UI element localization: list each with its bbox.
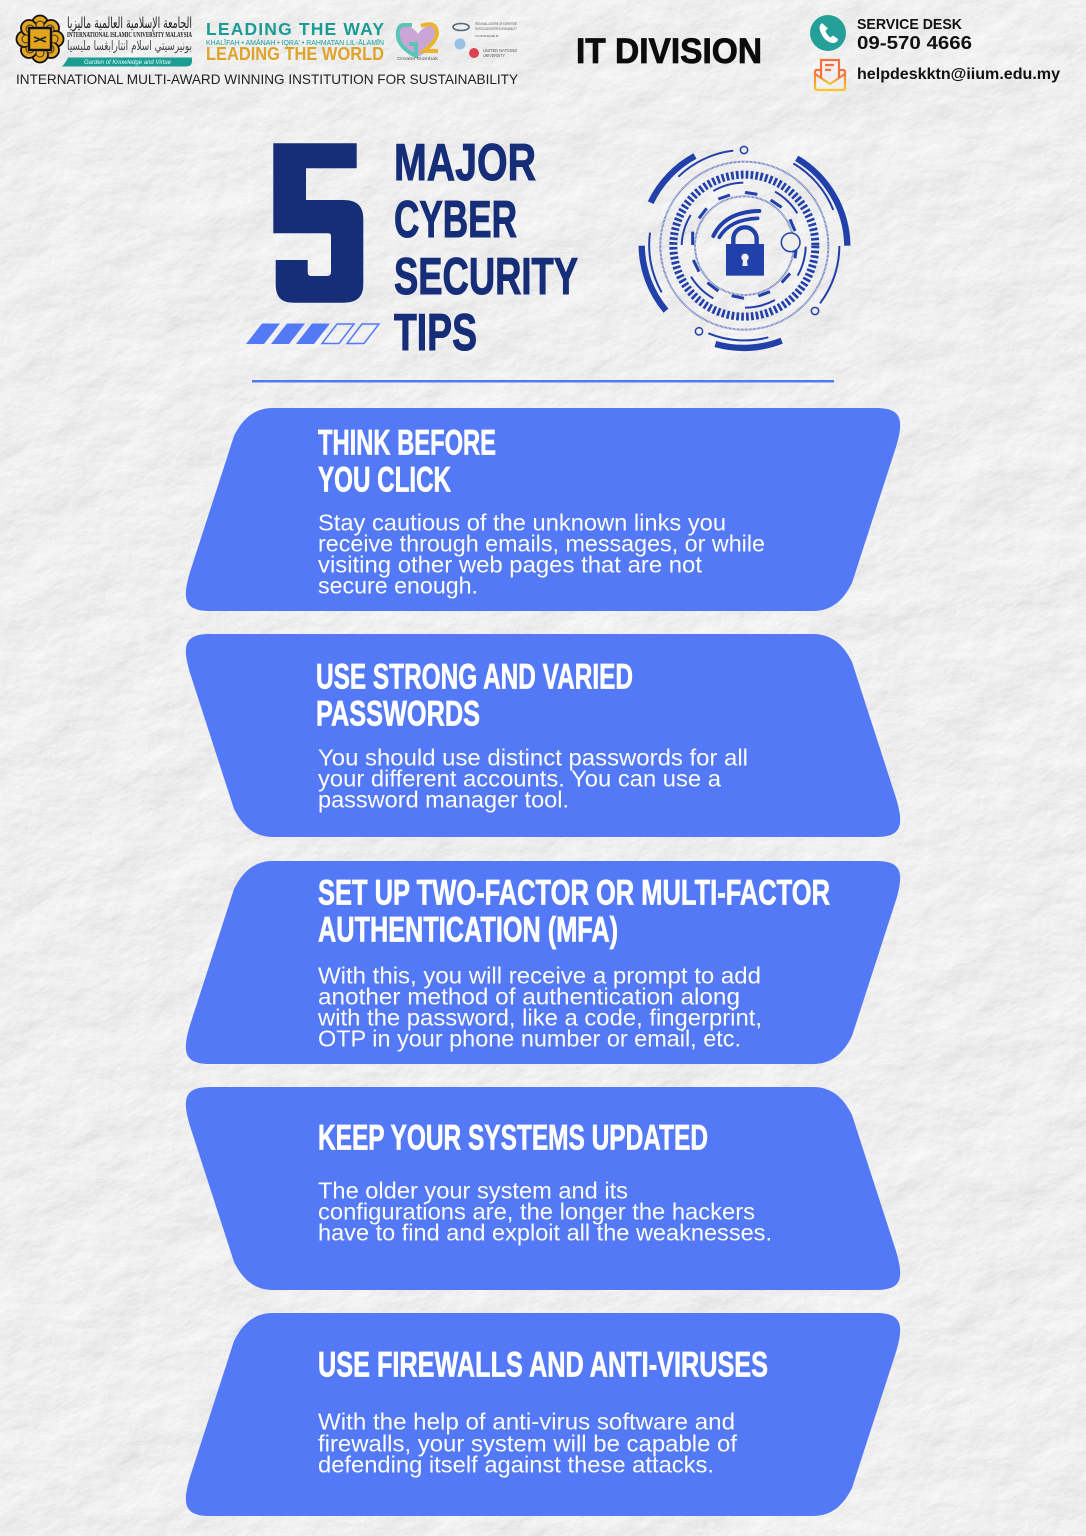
header tagline: INTERNATIONAL MULTI-AWARD WINNING INSTITUTION FOR SUSTAINABILITY — [16, 71, 519, 87]
title: MAJOR — [394, 134, 536, 192]
body text 2: You should use distinct passwords for all — [318, 744, 748, 770]
icon: email — [815, 60, 845, 90]
body text 3: another method of authentication along — [318, 984, 740, 1010]
heading 2 — [316, 658, 633, 734]
panel: firewalls and anti-viruses — [186, 1313, 900, 1516]
header: partner logos: UNIVERSITY — [483, 53, 505, 58]
big number 5 — [273, 143, 363, 303]
panel shape 3 — [186, 861, 900, 1064]
header: leading the way slogan: LEADING THE WORLD — [206, 43, 384, 64]
panel: strong passwords — [186, 634, 900, 837]
icon: greater gombak logo — [397, 24, 439, 61]
body text 3 — [317, 962, 762, 1052]
panel shape 5 — [186, 1313, 900, 1516]
body text 1 — [318, 510, 765, 598]
header: partner logos: UNITED NATIONS — [483, 48, 517, 53]
heading 3: AUTHENTICATION (MFA) — [318, 910, 618, 950]
heading 5: USE FIREWALLS AND ANTI-VIRUSES — [318, 1346, 768, 1384]
heading 4: KEEP YOUR SYSTEMS UPDATED — [318, 1118, 708, 1158]
body text 5: With the help of anti-virus software and — [318, 1408, 735, 1434]
heading 1: YOU CLICK — [318, 460, 451, 500]
panel shape 1 — [186, 408, 900, 611]
body text 2: password manager tool. — [318, 786, 569, 812]
body text 3: with the password, like a code, fingerprint, — [317, 1004, 762, 1030]
header: partner logos: ON EDUCATION FOR SUSTAINABILITY — [475, 27, 517, 31]
heading 3: SET UP TWO-FACTOR OR MULTI-FACTOR — [318, 874, 830, 912]
service desk contact — [857, 16, 972, 53]
divider line — [252, 380, 834, 382]
title: CYBER — [394, 191, 517, 249]
icon: phone — [810, 15, 846, 51]
body text 5: defending itself against these attacks. — [318, 1452, 714, 1478]
header: leading the way slogan: KHALĪFAH • AMĀNAH • IQRA' • RAHMATAN LIL-ĀLAMĪN — [206, 39, 384, 47]
heading 3 — [318, 874, 830, 950]
university name in English: INTERNATIONAL ISLAMIC UNIVERSITY MALAYSIA — [67, 30, 192, 39]
body text 4: configurations are, the longer the hackers — [318, 1198, 755, 1224]
icon: greater gombak logo: Greater Gombak — [397, 56, 439, 61]
body text 3: With this, you will receive a prompt to add — [318, 962, 761, 988]
header: leading the way slogan — [206, 19, 384, 64]
header: university logos — [16, 14, 192, 66]
body text 3: OTP in your phone number or email, etc. — [318, 1026, 741, 1052]
progress slashes — [246, 324, 379, 344]
body text 2: your different accounts. You can use a — [318, 766, 722, 792]
body text 4 — [318, 1178, 772, 1246]
body text 4: have to find and exploit all the weaknesses. — [318, 1220, 772, 1246]
panel: multi-factor authentication — [186, 861, 900, 1064]
panel shape 2 — [186, 634, 900, 837]
header: partner logos: REGIONAL CENTRE OF EXPERTISE — [475, 22, 517, 26]
heading 2: USE STRONG AND VARIED — [316, 658, 633, 696]
heading 1 — [318, 424, 496, 500]
icon: cyber security padlock — [642, 146, 847, 348]
header: partner logos — [453, 22, 517, 58]
heading 1: THINK BEFORE — [318, 424, 496, 462]
heading 2: PASSWORDS — [316, 694, 480, 734]
body text 1: Stay cautious of the unknown links you — [318, 510, 726, 536]
body text 2 — [318, 744, 748, 812]
body text 1: secure enough. — [318, 572, 478, 598]
email address: helpdeskktn@iium.edu.my — [857, 66, 1060, 83]
IT division label: IT DIVISION — [576, 32, 762, 71]
body text 4: The older your system and its — [318, 1178, 628, 1204]
title: TIPS — [394, 304, 477, 362]
panel: think before you click — [186, 408, 900, 611]
header: partner logos: ACKNOWLEDGED BY — [475, 34, 499, 38]
panel shape 4 — [186, 1087, 900, 1290]
title — [394, 134, 578, 362]
panel: keep systems updated — [186, 1087, 900, 1290]
icon: university seal — [16, 16, 64, 62]
title: SECURITY — [394, 248, 578, 306]
motto banner: Garden of Knowledge and Virtue — [84, 60, 172, 66]
header: leading the way slogan: LEADING THE WAY — [206, 19, 384, 39]
service desk contact: 09-570 4666 — [857, 33, 972, 53]
service desk contact: SERVICE DESK — [857, 16, 962, 33]
university name in Jawi: بونيرسيتي اسلام انتارابڠسا مليسيا — [67, 39, 192, 54]
body text 1: receive through emails, messages, or while — [318, 530, 765, 556]
body text 1: visiting other web pages that are not — [318, 552, 702, 578]
motto banner — [20, 58, 192, 66]
body text 5 — [318, 1408, 737, 1478]
body text 5: firewalls, your system will be capable of — [318, 1430, 737, 1456]
university name in Arabic: الجامعة الإسلامية العالمية ماليزيا — [67, 14, 192, 32]
